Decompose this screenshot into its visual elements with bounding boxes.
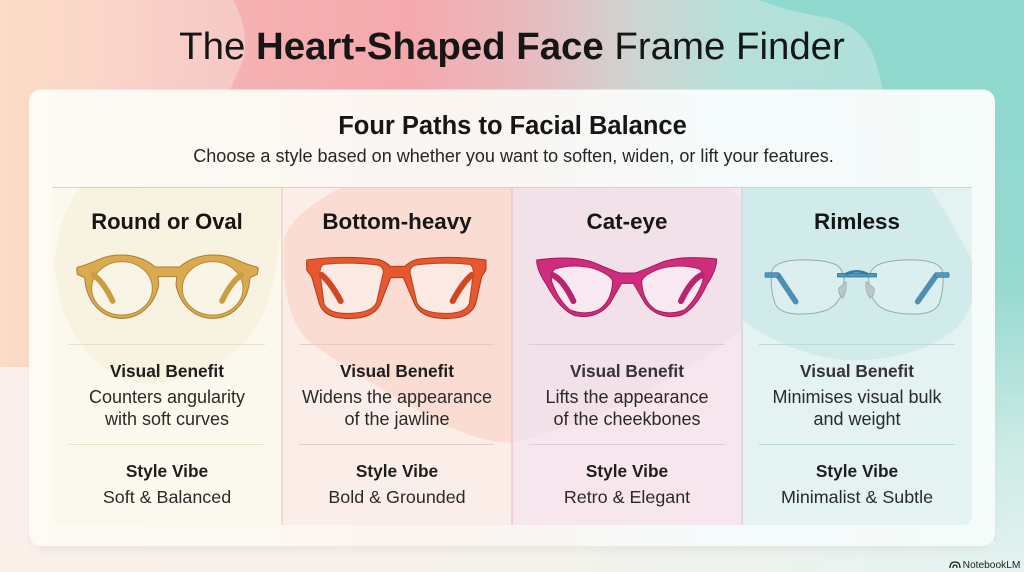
icon: rimless glasses: [765, 260, 949, 314]
title: The Heart-Shaped Face Frame Finder: [179, 25, 845, 68]
column: Rimless: and weight: [813, 409, 901, 429]
column: Cat-eye: [537, 209, 717, 507]
column: Round or Oval: [77, 209, 258, 507]
visual benefit text: Lifts the appearance: [545, 387, 709, 407]
column: Rimless: [765, 209, 949, 507]
visual benefit text: Widens the appearance: [302, 387, 492, 407]
column: Round or Oval: with soft curves: [104, 409, 229, 429]
icon: round glasses: [77, 255, 258, 318]
heading: Bottom-heavy: [322, 209, 472, 234]
column backgrounds: [52, 188, 972, 525]
style vibe label: Style Vibe: [586, 461, 669, 481]
visual benefit label: Visual Benefit: [340, 361, 454, 381]
column: Bottom-heavy: [302, 209, 492, 507]
panel heading: Four Paths to Facial Balance: [338, 112, 687, 140]
visual benefit label: Visual Benefit: [800, 361, 914, 381]
panel shadow: [31, 94, 993, 550]
visual benefit label: Visual Benefit: [570, 361, 684, 381]
main panel: [29, 90, 995, 546]
watermark: NotebookLM: [963, 560, 1020, 571]
icon: bottom-heavy glasses: [307, 257, 486, 318]
column: Bottom-heavy: of the jawline: [344, 409, 450, 429]
style vibe label: Style Vibe: [816, 461, 899, 481]
visual benefit label: Visual Benefit: [110, 361, 224, 381]
style vibe text: Bold & Grounded: [328, 487, 466, 507]
icon: cat-eye glasses: [537, 258, 717, 317]
style vibe label: Style Vibe: [126, 461, 209, 481]
style vibe text: Minimalist & Subtle: [781, 487, 933, 507]
visual benefit text: Minimises visual bulk: [772, 387, 943, 407]
style vibe label: Style Vibe: [356, 461, 439, 481]
column: Cat-eye: of the cheekbones: [553, 409, 701, 429]
panel subheading: Choose a style based on whether you want to soften, widen, or lift your features.: [193, 146, 834, 166]
heading: Cat-eye: [587, 209, 667, 234]
style vibe text: Soft & Balanced: [103, 487, 231, 507]
style vibe text: Retro & Elegant: [564, 487, 690, 507]
visual benefit text: Counters angularity: [89, 387, 245, 407]
heading: Rimless: [814, 209, 900, 234]
heading: Round or Oval: [91, 209, 243, 234]
